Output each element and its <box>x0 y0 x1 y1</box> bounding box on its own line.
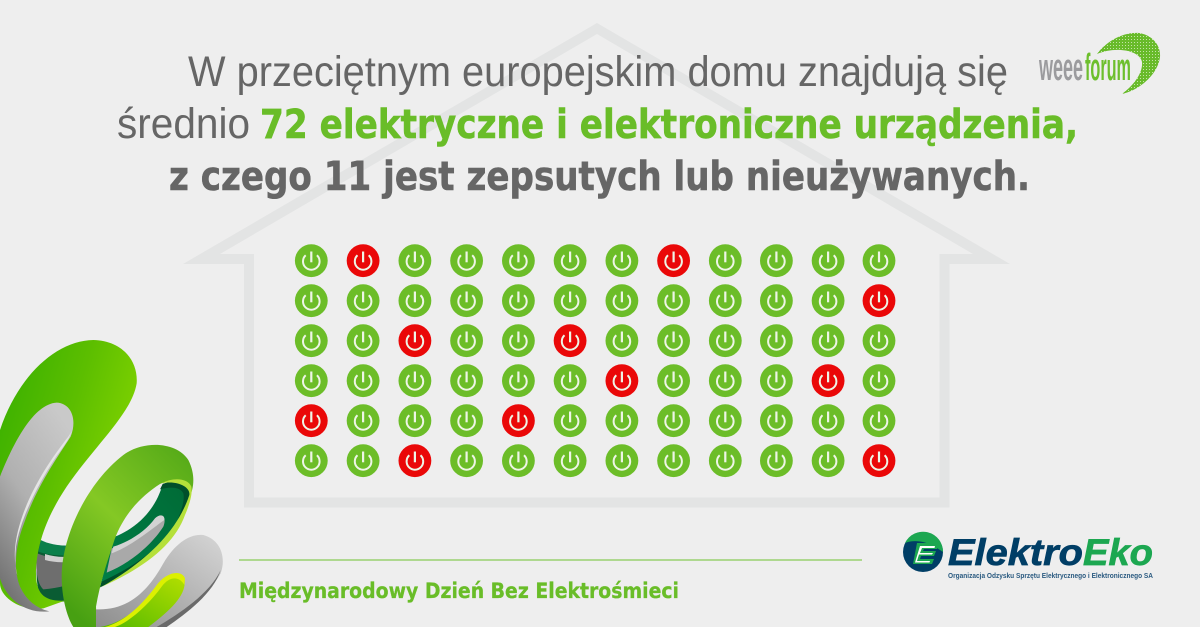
logo emblem <box>903 532 943 572</box>
swirl: second green ring <box>62 445 193 627</box>
swirl: ring yellow edge <box>101 479 192 587</box>
logo: WEEE Forum: forum <box>1085 47 1131 89</box>
row 4 <box>295 364 895 397</box>
logo wordmark Elektro: Elektro <box>948 532 1083 573</box>
swirl: lime highlight edge <box>105 573 185 627</box>
bottom divider line <box>239 559 862 561</box>
row 3 <box>295 324 895 357</box>
swirl: lower right shadow edge <box>157 570 221 627</box>
logo: WEEE Forum <box>1039 33 1160 94</box>
heading line 2 highlight: 72 elektryczne i elektroniczne urządzenia, <box>260 102 1078 148</box>
swirl: second ring inner band <box>100 481 190 587</box>
logo tagline: Organizacja Odzysku Sprzętu Elektrycznego i Elektronicznego SA <box>948 573 1153 580</box>
swirl: ribbon highlight edge <box>15 427 73 575</box>
logo: ElektroEko <box>903 532 1153 580</box>
heading line 1: W przeciętnym europejskim domu znajdują się <box>188 48 1008 96</box>
swirl emblem <box>0 340 223 627</box>
logo wordmark Eko: Eko <box>1083 532 1153 573</box>
swirl: large green ribbon <box>0 340 137 609</box>
footer caption: Międzynarodowy Dzień Bez Elektrośmieci <box>239 579 679 603</box>
heading line 3: z czego 11 jest zepsutych lub nieużywanych. <box>169 154 1030 200</box>
power button grid <box>295 244 895 477</box>
row 2 <box>295 284 895 317</box>
logo swoosh <box>1097 33 1160 94</box>
row 6 <box>295 444 895 477</box>
house outline <box>183 23 1010 508</box>
row 5 <box>295 404 895 437</box>
row 1 <box>295 244 895 277</box>
swirl: lower left dark loop <box>36 535 115 602</box>
logo: WEEE Forum: weee <box>1039 47 1083 89</box>
heading <box>117 48 1078 200</box>
swirl: large ribbon grey inner <box>0 403 73 612</box>
swirl: lower right grey ribbon <box>96 535 223 627</box>
swirl: lower right lime core <box>100 574 185 627</box>
heading line 2 lead: średnio <box>117 100 250 148</box>
